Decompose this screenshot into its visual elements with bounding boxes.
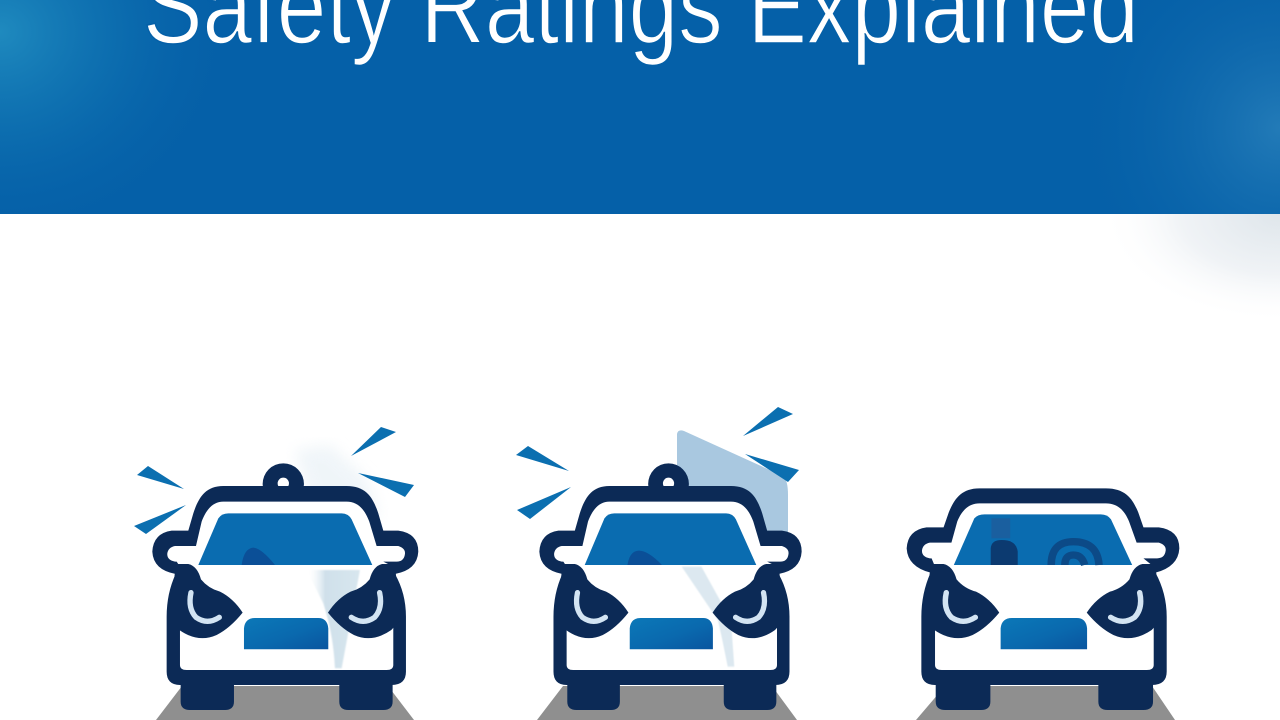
road 3 (916, 686, 1175, 720)
car 3 body (907, 488, 1179, 710)
impact lines car 2 (516, 407, 799, 519)
background haze top right (1100, 214, 1280, 324)
car 1: front view with impact lines (134, 427, 418, 720)
interior seat silhouette (991, 518, 1018, 565)
impact lines car 1 (134, 427, 414, 534)
road 1 (156, 686, 414, 720)
glare above car 1 (295, 445, 380, 520)
road 2 (537, 686, 797, 720)
header band (0, 0, 1280, 214)
car 2 body (539, 463, 802, 710)
car 2: front view with side panel (516, 407, 802, 720)
car 3: front view with interior seat and wheel (907, 488, 1179, 720)
translucent panel behind car 2 (677, 430, 788, 535)
car 1 body (152, 463, 418, 710)
interior steering wheel (1051, 542, 1099, 565)
